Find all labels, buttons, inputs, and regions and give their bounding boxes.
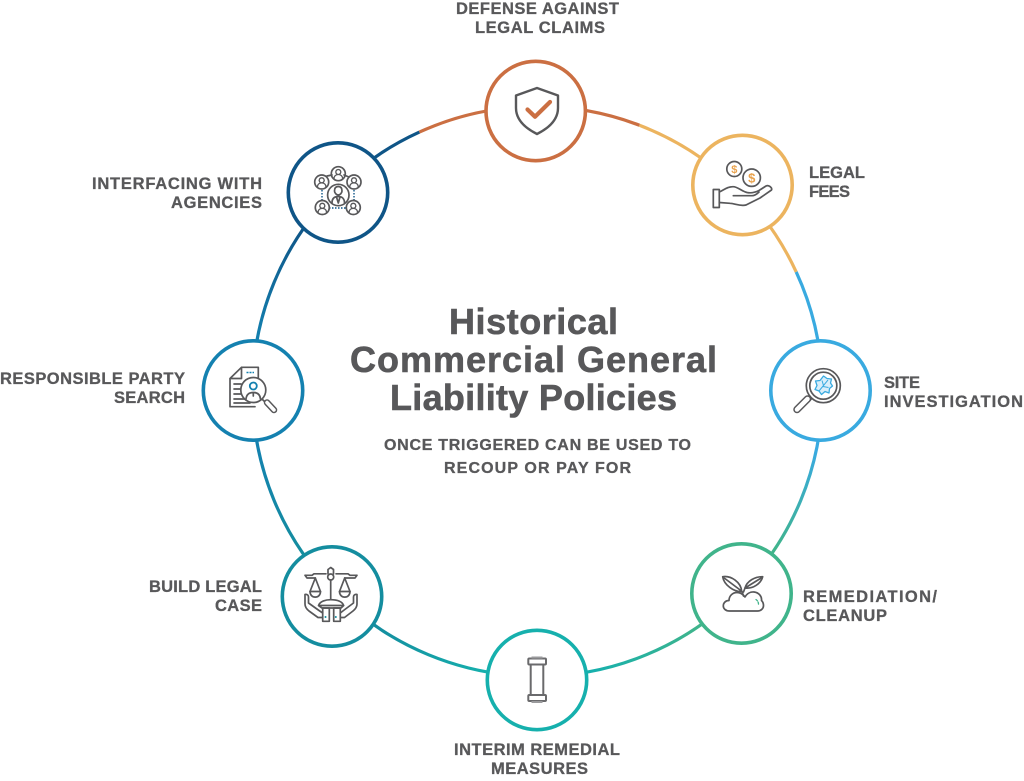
label: MEASURES (491, 760, 588, 778)
item: responsible party search (0, 341, 303, 440)
item: remediation / cleanup (692, 544, 937, 643)
icon: hand with coins: $ (748, 170, 756, 186)
label (884, 374, 1023, 411)
label (456, 0, 619, 37)
centre subheading: RECOUP OR PAY FOR (444, 460, 631, 477)
item: build legal case (149, 547, 382, 646)
label: SEARCH (114, 389, 185, 407)
label: CLEANUP (803, 607, 887, 625)
label: AGENCIES (171, 194, 262, 212)
icon: hand with coins: $ (731, 164, 737, 176)
node circle (771, 341, 870, 440)
label (809, 164, 865, 201)
label: BUILD LEGAL (149, 578, 262, 596)
icon: seedling on cloud (723, 577, 764, 611)
centre heading (350, 301, 717, 418)
item: site investigation (771, 341, 1023, 440)
label: FEES (809, 183, 850, 201)
label (0, 370, 185, 407)
icon: magnifier over leaf (797, 369, 840, 410)
label: INVESTIGATION (884, 393, 1023, 411)
ring connecting the eight items (252, 106, 822, 676)
node circle (203, 341, 303, 440)
centre subheading (384, 437, 691, 477)
label: RESPONSIBLE PARTY (0, 370, 185, 388)
label: LEGAL (809, 164, 865, 182)
label: DEFENSE AGAINST (456, 0, 619, 18)
label (803, 588, 937, 625)
label: SITE (884, 374, 920, 392)
node circle (487, 630, 587, 730)
node circle (693, 135, 792, 235)
node circle (288, 143, 388, 242)
label: REMEDIATION/ (803, 588, 937, 606)
icon: document with magnifier and person (230, 367, 274, 410)
label (149, 578, 262, 615)
item: legal fees (693, 135, 865, 235)
label: CASE (215, 597, 262, 615)
label (92, 175, 262, 212)
icon: scales held by hands (305, 568, 357, 621)
centre heading: Commercial General (350, 339, 717, 380)
node circle (692, 544, 791, 643)
item: interfacing with agencies (92, 143, 388, 242)
centre heading: Historical (449, 301, 618, 342)
item: interim remedial measures (454, 630, 620, 778)
label (454, 741, 620, 778)
node circle (282, 547, 382, 646)
node circle (486, 61, 585, 161)
icon: shield with check (516, 88, 558, 134)
label: INTERFACING WITH (92, 175, 262, 193)
icon: hand with coins (713, 162, 772, 208)
centre heading: Liability Policies (390, 377, 677, 418)
icon: network of people (315, 167, 361, 214)
item: defense against legal claims (456, 0, 619, 161)
label: INTERIM REMEDIAL (454, 741, 620, 759)
label: LEGAL CLAIMS (475, 19, 605, 37)
icon: pipe section (528, 656, 546, 703)
centre subheading: ONCE TRIGGERED CAN BE USED TO (384, 437, 691, 454)
